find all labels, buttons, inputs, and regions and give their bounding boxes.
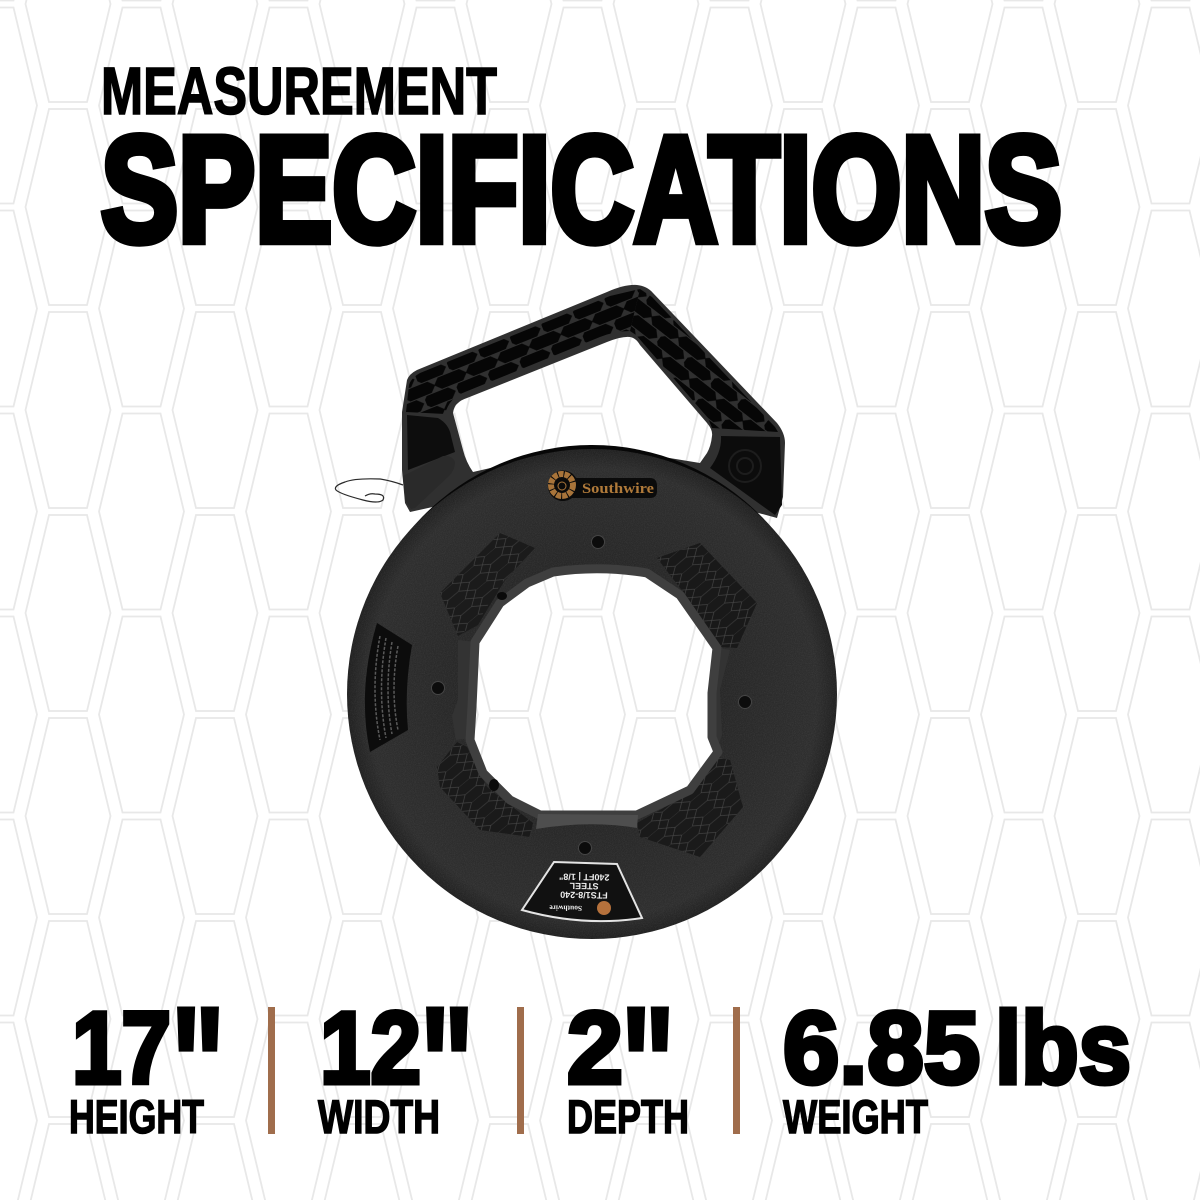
spec: depth xyxy=(567,973,689,1157)
screws xyxy=(432,536,752,854)
reel handle xyxy=(335,285,785,518)
warning label xyxy=(365,623,412,752)
label text upside down: STEEL xyxy=(569,881,599,891)
label width: WIDTH xyxy=(318,1090,440,1143)
double prime mark: " xyxy=(171,973,225,1157)
label text upside down: Southwire xyxy=(549,903,582,913)
latch xyxy=(403,456,455,509)
handle honeycomb grip right xyxy=(630,289,778,432)
reel texture xyxy=(347,449,837,939)
value 2 inches: 2 xyxy=(567,991,623,1105)
inner clips xyxy=(489,592,507,791)
opening rim xyxy=(470,569,718,815)
label depth: DEPTH xyxy=(567,1090,689,1143)
centre opening xyxy=(470,569,718,815)
spec: weight xyxy=(783,991,1131,1143)
pattern inside opening xyxy=(470,569,718,815)
value 12 inches: 12 xyxy=(320,991,421,1105)
southwire logo badge xyxy=(548,470,657,501)
handle left block xyxy=(407,415,455,470)
pull tip wire xyxy=(335,479,403,502)
value 6.85 lbs: lbs xyxy=(995,991,1131,1105)
bottom lug highlight xyxy=(536,814,638,829)
label text upside down: FTS1/8-240 xyxy=(560,890,608,900)
handle right block xyxy=(710,436,782,515)
label text upside down xyxy=(549,871,610,913)
spec: height xyxy=(69,973,225,1157)
reel face xyxy=(347,449,837,939)
divider 3 xyxy=(733,1007,740,1134)
divider 1 xyxy=(268,1007,275,1134)
label weight: WEIGHT xyxy=(783,1090,928,1143)
heading: measurement: MEASUREMENT xyxy=(101,54,497,129)
double prime mark: " xyxy=(621,973,675,1157)
label logo mark xyxy=(597,901,611,915)
label text upside down: 240FT | 1/8" xyxy=(559,872,610,882)
handle honeycomb grip left xyxy=(406,289,640,414)
title xyxy=(101,54,1062,273)
value 17 inches: 17 xyxy=(72,991,171,1105)
lug bevels xyxy=(452,640,730,752)
value 6.85 lbs xyxy=(783,991,1131,1105)
spec: width xyxy=(318,973,474,1157)
product: fish tape reel xyxy=(335,285,837,939)
value 6.85 lbs: 6.85 xyxy=(783,991,980,1105)
southwire logo badge: Southwire xyxy=(582,481,654,497)
divider 2 xyxy=(517,1007,524,1134)
double prime mark: " xyxy=(420,973,474,1157)
label height: HEIGHT xyxy=(69,1090,204,1143)
rear rim xyxy=(352,445,832,935)
grip patches xyxy=(437,533,757,857)
product label xyxy=(522,862,642,921)
